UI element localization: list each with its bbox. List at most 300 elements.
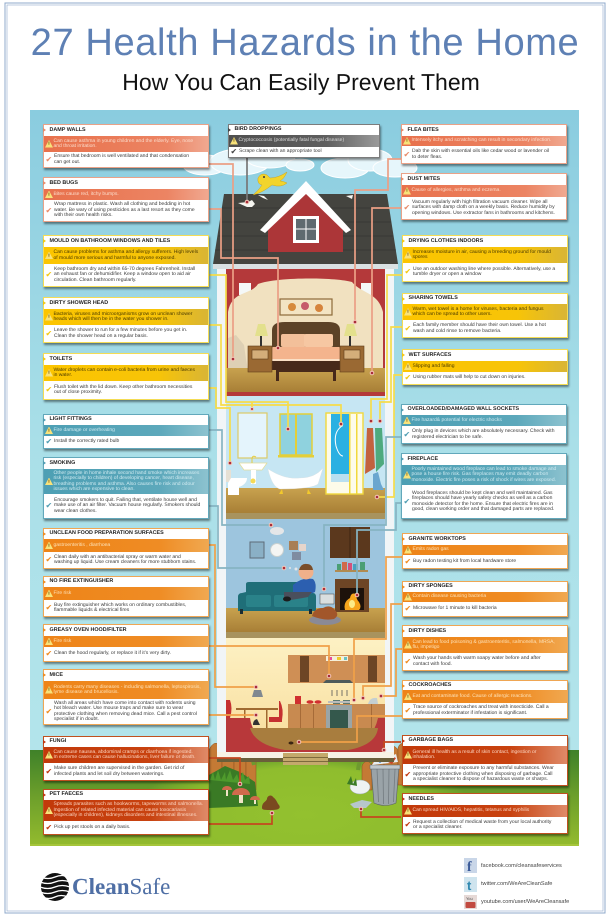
fence: left (209, 743, 256, 790)
tip: ✔ (404, 203, 410, 212)
warning (403, 545, 567, 555)
tip: ✔ (404, 706, 411, 714)
tip: ✔ (46, 649, 52, 658)
warning: ! (407, 594, 409, 600)
dormer (260, 181, 351, 252)
warning: ! (48, 252, 50, 258)
tip (46, 822, 130, 832)
warning (403, 805, 567, 817)
red siding under cutaway (226, 718, 385, 752)
cockroach (288, 742, 294, 744)
card: smoking (43, 457, 209, 519)
tip: a specialist cleaner to dispose of hazardous waste or sharps. (413, 776, 548, 782)
tip: or a specialist cleaner. (413, 824, 462, 830)
connector: smoking (209, 506, 286, 570)
dirty dishes and sponge (333, 698, 378, 704)
warning: Increases moisture in air, causing a breeding ground for mould (412, 249, 551, 255)
warning (402, 415, 566, 426)
tip: washing up liquid. Use cream cleaners for more stubborn stains. (54, 559, 196, 565)
warning: ! (407, 547, 409, 553)
painting (280, 299, 332, 315)
tip: ✔ (46, 385, 52, 394)
connector: bird droppings (245, 158, 249, 204)
tip: Flush toilet with the lid down. Keep other bathroom necessities (54, 384, 192, 390)
warning: which can be spread to other users. (412, 311, 492, 317)
icon: CleanSafe globe logo (40, 873, 70, 901)
tip: ✔ (46, 206, 52, 214)
smoke puffs (270, 527, 298, 570)
card: pet faeces (43, 789, 209, 835)
lamps (255, 324, 357, 346)
card: fireplace (401, 453, 567, 519)
icon: youtube (464, 895, 477, 909)
warning: Can cause problems for asthma and allergy sufferers. High levels (54, 249, 198, 255)
tip: to deter fleas. (412, 154, 442, 160)
tip: ✔ (46, 822, 52, 832)
red jug and bowls (295, 696, 322, 704)
tip: Trace source of cockroaches and treat with insecticide. Call a (413, 704, 549, 710)
tip: Scrape clean with an appropriate tool (239, 148, 322, 154)
tip: Dab the skin with essential oils like cedar wood or lavender oil (412, 148, 549, 154)
tip: opening windows. Use extractor fans in bathrooms and kitchens. (412, 210, 555, 216)
warning: Fire risk (54, 638, 71, 644)
tip: ✔ (404, 820, 411, 829)
card: cockroaches (402, 680, 568, 719)
warning: ! (406, 138, 408, 144)
tip (46, 201, 195, 218)
heading: COCKROACHES (408, 682, 451, 688)
trash can (370, 753, 400, 806)
card: fungi (43, 736, 209, 781)
warning (44, 636, 208, 647)
icon: twitter (464, 877, 477, 893)
kitchen floor cutaway (250, 728, 378, 750)
card: drying clothes indoors (402, 235, 568, 282)
front eave and steps (217, 752, 394, 765)
warning: ! (48, 141, 50, 147)
connector: fireplace (355, 503, 401, 597)
tip: ✔ (46, 603, 52, 612)
connector: fungi (209, 758, 242, 786)
warning (402, 136, 566, 146)
tip (404, 819, 552, 830)
tip: Vacuum regularly with high filtration vacuum cleaner. Wipe all (412, 199, 548, 205)
window (278, 414, 314, 458)
connector: pet faeces (209, 811, 274, 824)
warning: ! (406, 472, 408, 478)
connector: flea bites (353, 159, 401, 324)
warning: Warm, wet towel is a home for viruses, bacteria and fungus (412, 306, 543, 312)
warning: ! (48, 687, 50, 693)
tip: fireplaces should have yearly safety checks as well as a carbon (412, 495, 552, 501)
warning: Spreads parasites such as hookworms, tapeworms and salmonella. (54, 801, 203, 807)
warning: Poorly maintained wood fireplace can lead to smoke damage and (412, 466, 556, 472)
warning: Other people in home inhale second hand smoke which increases (54, 470, 199, 476)
heading: BED BUGS (50, 180, 78, 186)
heading: NEEDLES (408, 796, 434, 802)
card: mice (43, 669, 209, 725)
connector: wet surfaces (375, 375, 402, 499)
tip: ✔ (46, 437, 52, 446)
warning: ! (407, 752, 409, 758)
heading: DUST MITES (408, 176, 440, 182)
heading: FIREPLACE (408, 456, 438, 462)
tip: with their own health risks. (54, 212, 113, 218)
tip: tumble dryer or open a window (413, 271, 481, 277)
icon: facebook: f (467, 860, 472, 875)
heading: UNCLEAN FOOD PREPARATION SURFACES (50, 530, 164, 536)
warning: ! (407, 252, 409, 258)
tip (46, 266, 195, 283)
tip: Microwave for 1 minute to kill bacteria (413, 605, 497, 611)
cooker hood (323, 680, 353, 683)
tip: ✔ (46, 154, 52, 164)
warning: Fire damage or overheating (54, 427, 115, 433)
warning: and throat irritation. (54, 143, 97, 149)
warning: ! (48, 314, 50, 320)
tip: an exhaust fan or dehumidifier. Keep a window open to aid air (54, 271, 191, 277)
tip: Using rubber mats will help to cut down on injuries. (413, 374, 526, 380)
warning: Can lead to food poisoning & gastroenteritis, salmonella, MRSA, (412, 639, 555, 645)
tip (46, 497, 200, 514)
tip: Wash your hands with warm soapy water before and after (413, 655, 541, 661)
warning: Bites cause red, itchy bumps. (54, 191, 119, 197)
tip (404, 322, 546, 334)
tip: Leave the shower to run for a few minutes before you get in. (54, 327, 187, 333)
warning (44, 800, 208, 821)
tip: Prevent or eliminate exposure to any harmful substances. Wear (413, 765, 554, 771)
tip: out of close proximity. (54, 389, 102, 395)
lower cabinets (288, 701, 385, 736)
tip: monoxide detector for the home. Ensure that electric fires are in (412, 500, 553, 506)
card: light fittings (43, 414, 209, 449)
tip (46, 649, 171, 658)
logo wordmark: CleanSafe (72, 874, 170, 899)
tip: appropriate protective clothing when disposing of garbage. Call (413, 771, 553, 777)
connector: dishes (379, 649, 402, 698)
heading: LIGHT FITTINGS (50, 416, 92, 422)
nightstands (248, 346, 364, 372)
tip: ✔ (46, 706, 52, 716)
connector: mould (209, 275, 290, 431)
connector: garbage bag (382, 742, 401, 752)
warning: risk (especially to children) of developing cancer, heart disease, (54, 475, 194, 481)
tip: flammable liquids & electrical fires (54, 607, 129, 613)
warning: ! (48, 478, 50, 484)
warning (44, 681, 208, 699)
sink (239, 456, 267, 484)
card: unclean food preparation surfaces (43, 528, 209, 569)
tip (404, 148, 549, 160)
tip: wash and cold rinse to remove bacteria. (413, 328, 501, 334)
icon: yellow bird (253, 172, 287, 195)
tip: infected plants and let soil dry between waterings. (54, 770, 164, 776)
tip: ✔ (46, 766, 52, 776)
tip (404, 604, 497, 613)
warning (403, 746, 567, 764)
tip (46, 327, 187, 338)
warning: ! (48, 542, 50, 548)
warning: Contain disease causing bacteria (412, 593, 486, 599)
room: bathroom (226, 396, 385, 519)
warning: Rodents carry many diseases - including salmonella, leptospirosis, (54, 684, 201, 690)
tip: Keep bathroom dry and within 65-70 degrees Fahrenheit. Install (54, 266, 195, 272)
spilled water (373, 472, 384, 490)
warning: Emits radon gas (412, 546, 449, 552)
icon: facebook (464, 858, 477, 875)
tip: make use of an air filter. Vacuum house regularly. Smokers should (54, 502, 200, 508)
heading: SHARING TOWELS (408, 295, 458, 301)
card: dirty dishes (402, 625, 568, 671)
card: needles (402, 793, 568, 834)
social link: facebook: facebook.com/cleansafeservices (481, 862, 562, 868)
tip: ✔ (404, 324, 411, 332)
icon: youtube: You (466, 896, 473, 901)
dining table and chairs (226, 700, 283, 736)
tip (46, 602, 186, 613)
connector: mice (209, 713, 258, 717)
warning: ! (48, 808, 50, 814)
social link: twitter: twitter.com/WeAreCleanSafe (481, 880, 552, 886)
bush: left hedge arch (222, 741, 254, 765)
title: 27 Health Hazards in the Home (31, 22, 579, 64)
tip: contact with food. (413, 660, 452, 666)
tip (46, 437, 120, 446)
warning: Intensely itchy and scratching can result in secondary infection. (412, 137, 551, 143)
house: side trim columns (217, 266, 394, 754)
heading: GREASY OVEN HOOD/FILTER (50, 627, 127, 633)
tip: Only plug in devices which are absolutely necessary. Check with (412, 428, 554, 434)
heading: DAMP WALLS (50, 127, 86, 133)
card: wet surfaces (402, 349, 568, 385)
warning (44, 587, 208, 600)
warning: Can cause asthma in young children and the elderly. Eye, nose (54, 138, 193, 144)
tip: ✔ (46, 328, 52, 338)
tip: ✔ (404, 496, 410, 506)
warning: ! (407, 309, 409, 315)
warning: heads which will then be in the water you shower in. (54, 316, 169, 322)
tip: ✔ (404, 604, 411, 613)
warning (44, 136, 208, 152)
warning: ! (406, 188, 408, 194)
mirror (238, 413, 267, 458)
warning: Can spread HIV/AIDS, hepatitis, tetanus and syphilis (412, 807, 529, 813)
connector: dust mites (370, 208, 401, 375)
warning: ! (407, 694, 409, 700)
bathtub (268, 468, 323, 494)
connector: sponges (361, 604, 402, 700)
warning: ! (48, 192, 50, 198)
tip: Ensure that bedroom is well ventilated and that condensation (54, 153, 189, 159)
tip: wear clean clothes. (54, 508, 97, 514)
heading: GRANITE WORKTOPS (408, 536, 466, 542)
connector: damp walls (209, 164, 235, 361)
wall socket (320, 594, 334, 604)
man on sofa smoking (283, 564, 316, 602)
toilet (226, 470, 247, 495)
warning (403, 304, 567, 320)
tip (230, 147, 322, 156)
tip: Wash all areas which have come into contact with rodents using (54, 700, 196, 706)
warning: Eat and contaminate food. Cause of allergic reactions. (412, 693, 533, 699)
dog on rug (309, 606, 341, 625)
tip: circulation. Clean bathroom regularly. (54, 277, 136, 283)
connector: cockroaches (297, 716, 402, 744)
card: overloaded wall sockets (401, 404, 567, 444)
tip: can get out. (54, 158, 80, 164)
tip: protective clothing when removing dead mice. Call a pest control (54, 710, 197, 716)
tip: Each family member should have their own towel. Use a hot (413, 322, 546, 328)
warning (403, 592, 567, 602)
heading: MOULD ON BATHROOM WINDOWS AND TILES (50, 238, 170, 244)
tip: surfaces with damp cloth on a weekly basis. Reduce humidity by (412, 204, 555, 210)
tip: Encourage smokers to quit. Failing that, ventilate house well and (54, 497, 197, 503)
heading: FUNGI (50, 738, 66, 744)
tip: Make sure children are supervised in the garden. Get rid of (54, 765, 184, 771)
tip (404, 266, 556, 277)
card: toilets (43, 353, 209, 400)
card: mould (43, 235, 209, 287)
connector: mirror mould (250, 402, 254, 410)
tip (404, 765, 554, 782)
tip (404, 490, 554, 512)
room: bedroom (226, 268, 385, 396)
tip: water. Be wary of using pesticides as a last resort as they come (54, 207, 195, 213)
warning: inhalation. (412, 754, 435, 760)
warning (403, 361, 567, 372)
bush: right hedge arch (358, 743, 392, 770)
tip: Wrap mattress in plastic. Wash all clothing and bedding in hot (54, 201, 190, 207)
bed (270, 322, 340, 381)
room: kitchen (217, 638, 394, 765)
tip: Clean the shower head on a regular basis. (54, 332, 148, 338)
connector: granite (352, 557, 402, 702)
card: bed bugs (43, 177, 209, 222)
tip: Use an outdoor washing line where possible. Alternatively, use a (413, 266, 555, 272)
warning: General ill health as a result of skin contact, ingestion or (412, 749, 536, 755)
mice (252, 690, 263, 725)
warning (402, 465, 566, 485)
warning: Cause of allergies, asthma and eczema. (412, 187, 501, 193)
heading: DIRTY SHOWER HEAD (50, 300, 108, 306)
tip: registered electrician to be safe. (412, 434, 483, 440)
warning: ! (48, 752, 50, 758)
tip: ✔ (46, 555, 52, 564)
card: flea bites (401, 124, 567, 164)
warning (403, 247, 567, 263)
warning: Ingestion of related infected material can cause toxocariasis (54, 807, 186, 813)
warning: ! (407, 808, 409, 814)
connector: no fire extinguisher (209, 646, 331, 678)
connector: wall sockets (322, 437, 401, 591)
tip (404, 556, 516, 566)
heading: NO FIRE EXTINGUISHER (50, 578, 113, 584)
ground: lawn (30, 750, 579, 846)
warning: ! (48, 370, 50, 376)
tip: professional exterminator if infestation is significant. (413, 710, 527, 716)
shower (326, 413, 363, 494)
connector: needles (359, 807, 401, 817)
room: living room (226, 519, 385, 638)
warning: Fire risk (54, 590, 71, 596)
fireplace (335, 579, 369, 612)
connector: bed bugs (209, 209, 280, 350)
warning: ! (48, 428, 50, 434)
card: sharing towels (402, 293, 568, 338)
tip: ✔ (46, 270, 52, 279)
warning (44, 425, 208, 436)
tip: ✔ (404, 267, 411, 276)
tip: Request a collection of medical waste from your local authority (413, 819, 551, 825)
connector: drying clothes (369, 275, 402, 423)
clouds (183, 146, 417, 178)
heading: GARBAGE BAGS (408, 737, 453, 743)
warning: ! (407, 364, 409, 370)
tip: good, clean working order and that damaged parts are replaced. (412, 506, 554, 512)
warning: ! (407, 642, 409, 648)
tip: Install the correctly rated bulb (54, 438, 119, 444)
garden plants and mushrooms (209, 766, 260, 808)
warning (403, 690, 567, 703)
card: no fire extinguisher (43, 576, 209, 617)
warning: ! (48, 638, 50, 644)
tip: Clean the hood regularly, or replace it if it's very dirty. (54, 650, 171, 656)
tip (404, 655, 541, 666)
warning (44, 539, 208, 552)
warning (403, 637, 567, 653)
warning: Bacteria, viruses and microorganisms grow on unclean shower (54, 311, 192, 317)
tip (46, 384, 192, 395)
warning: Can cause nausea, abdominal cramps or diarrhoea if ingested. (54, 749, 193, 755)
warning: Water droplets can contain e-coli bacteria from urine and faeces (54, 367, 195, 373)
warning: Cryptococcosis (potentially fatal fungal disease) (238, 137, 344, 143)
social link: youtube: youtube.com/user/WeAreCleansafe (481, 898, 569, 904)
heading: PET FAECES (50, 791, 83, 797)
card: bird droppings (228, 124, 380, 158)
warning: In extreme cases can cause hallucinations, liver failure or death. (54, 754, 196, 760)
warning (44, 189, 208, 200)
tip: ✔ (230, 147, 237, 156)
warning: gastroenteritis , diarrhoea (54, 542, 110, 548)
tip: ✔ (404, 770, 411, 778)
warning (402, 185, 566, 197)
card: granite worktops (402, 533, 568, 569)
tip: ✔ (404, 150, 410, 158)
books (335, 562, 368, 572)
warning (229, 135, 379, 147)
tip (46, 554, 196, 565)
tip (404, 704, 549, 716)
tip (404, 428, 554, 440)
warning: flu, impetigo (412, 644, 439, 650)
warning: pose a house fire risk. Gas fireplaces may emit deadly carbon (412, 471, 548, 477)
bird droppings on roof (238, 195, 353, 207)
heading: FLEA BITES (408, 127, 439, 133)
tip: ✔ (404, 430, 410, 438)
warning (44, 365, 208, 381)
tip: ✔ (404, 373, 411, 382)
heading: OVERLOADED/DAMAGED WALL SOCKETS (408, 406, 519, 412)
warning: Fire hazard& potential for electric shocks (412, 417, 502, 423)
warning: of mould more serious and harmful to anyone exposed. (54, 254, 176, 260)
house: roof (213, 181, 398, 269)
heading: DIRTY SPONGES (408, 583, 453, 589)
warning (44, 747, 208, 763)
tip: ✔ (404, 556, 411, 566)
heading: DIRTY DISHES (408, 628, 446, 634)
card: damp walls (43, 124, 209, 168)
card: greasy oven hood (43, 624, 209, 662)
